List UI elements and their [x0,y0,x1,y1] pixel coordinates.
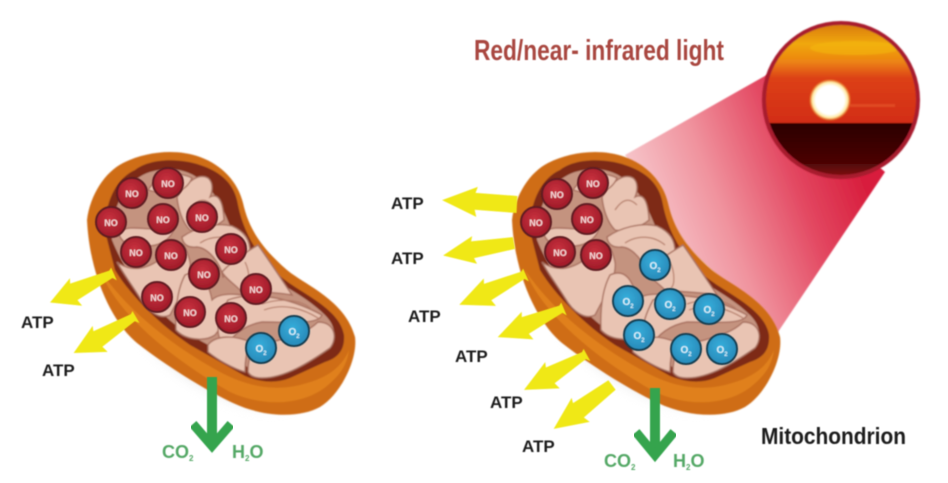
oxygen molecules, left: 2 [263,351,267,357]
oxygen molecules, left: 2 [296,334,300,340]
oxygen molecules, right: O [703,305,711,316]
CO2 and H2O labels, right [604,451,704,472]
oxygen molecules, right: 2 [688,352,692,358]
ATP labels, right: ATP [408,307,441,326]
green arrow, left [193,377,231,446]
oxygen molecules, right: 2 [711,312,715,318]
heading: red/near-infrared light: Red/near- infrared light [474,35,724,67]
ATP labels, left: ATP [21,313,54,332]
NO molecules, right: NO [589,251,603,261]
oxygen molecules, right: 2 [672,307,676,313]
NO molecules, right [521,168,611,270]
NO molecules, left: NO [197,270,211,280]
oxygen molecules, right: O [649,261,657,272]
NO molecules, left: NO [161,179,175,189]
NO molecules, left: NO [150,293,164,303]
icon: sunset circle [760,21,922,179]
ATP labels, right [391,194,555,456]
ATP labels, right: ATP [391,249,424,268]
oxygen molecules, right: O [633,331,641,342]
yellow ATP arrows, left [44,261,144,367]
oxygen molecules, left: O [288,327,296,338]
ATP labels, right: ATP [391,194,424,213]
ATP labels, left: ATP [42,361,75,380]
NO molecules, right: NO [550,190,564,200]
ATP labels, right: ATP [490,393,523,412]
NO molecules, left: NO [249,285,263,295]
CO2 and H2O labels, left: CO [162,442,189,462]
ATP labels, right: ATP [522,437,555,456]
NO molecules, left: NO [125,189,139,199]
CO2 and H2O labels, right: 2 [631,463,636,472]
light beam [625,72,885,332]
NO molecules, left: NO [104,218,118,228]
NO molecules, left: NO [156,215,170,225]
NO molecules, right: NO [580,215,594,225]
oxygen molecules, right: O [716,345,724,356]
NO molecules, left [96,168,271,333]
ATP labels, right: ATP [455,347,488,366]
oxygen molecules, right: 2 [641,338,645,344]
CO2 and H2O labels, left [162,442,263,463]
oxygen molecules, right: 2 [724,352,728,358]
NO molecules, left: NO [195,213,209,223]
NO molecules, left: NO [183,308,197,318]
CO2 and H2O labels, right: CO [604,451,631,471]
label: Mitochondrion: Mitochondrion [761,423,906,449]
oxygen molecules, right: O [680,345,688,356]
CO2 and H2O labels, left: H [232,442,245,462]
NO molecules, right: NO [586,179,600,189]
oxygen molecules, right: O [664,300,672,311]
CO2 and H2O labels, right: 2 [686,463,691,472]
oxygen molecules, right: 2 [630,304,634,310]
ATP labels, left [21,313,75,380]
oxygen molecules, left: O [255,344,263,355]
NO molecules, left: NO [129,248,143,258]
NO molecules, right: NO [529,218,543,228]
oxygen molecules, right [613,250,737,364]
oxygen molecules, right: 2 [657,268,661,274]
NO molecules, left: NO [224,245,238,255]
CO2 and H2O labels, left: 2 [245,454,250,463]
right mitochondrion [512,152,780,438]
yellow ATP arrows, right [441,185,622,442]
NO molecules, right: NO [553,248,567,258]
green arrow, right [636,388,674,455]
left mitochondrion [87,152,355,438]
NO molecules, left: NO [224,314,238,324]
CO2 and H2O labels, right: H [673,451,686,471]
NO molecules, left: NO [164,251,178,261]
CO2 and H2O labels, left: 2 [189,454,194,463]
CO2 and H2O labels, right: O [690,451,704,471]
CO2 and H2O labels, left: O [249,442,263,462]
oxygen molecules, right: O [622,297,630,308]
oxygen molecules, left [246,316,309,363]
